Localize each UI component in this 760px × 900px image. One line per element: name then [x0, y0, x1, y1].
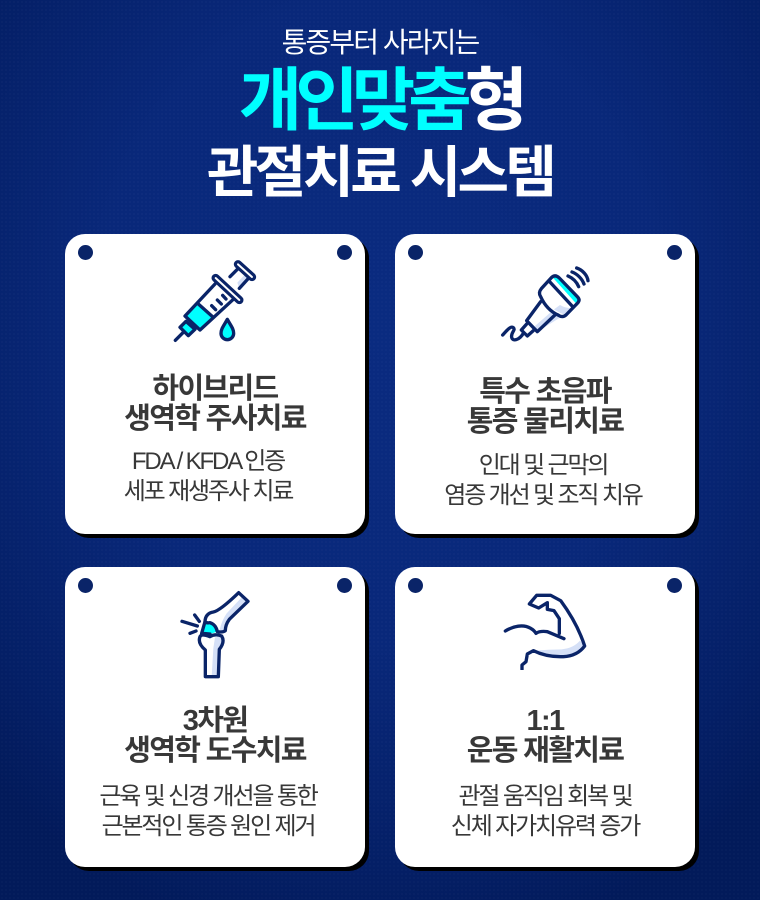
description: [444, 452, 643, 509]
panel: hybrid injection: [65, 234, 365, 534]
heading: [467, 705, 624, 767]
description: 인대 및 근막의: [479, 452, 607, 479]
description: 신체 자가치유력 증가: [451, 813, 639, 840]
description: 세포 재생주사 치료: [124, 478, 292, 505]
heading: 특수 초음파: [479, 376, 611, 408]
description: [124, 448, 294, 505]
icon: ultrasound probe: [500, 266, 590, 342]
subtitle: 통증부터 사라지는: [282, 27, 478, 58]
description: [451, 783, 641, 840]
description: FDA / KFDA 인증: [132, 448, 284, 475]
description: 관절 움직임 회복 및: [458, 783, 632, 810]
heading: [124, 705, 306, 767]
panel: manual therapy: [65, 567, 365, 867]
icon: flexed arm: [504, 594, 586, 670]
heading: 1:1: [527, 705, 563, 737]
icon: syringe: [174, 260, 256, 342]
description: 염증 개선 및 조직 치유: [444, 482, 642, 509]
panel: rehabilitation: [395, 567, 695, 867]
heading: 운동 재활치료: [467, 735, 623, 767]
heading: [467, 376, 624, 438]
heading: 하이브리드: [152, 373, 278, 405]
heading: 생역학 도수치료: [124, 735, 306, 767]
main title line 1: 개인맞춤형: [239, 62, 521, 139]
title: [207, 27, 553, 204]
heading: 생역학 주사치료: [124, 403, 306, 435]
heading: [124, 373, 306, 435]
main title line 2: 관절치료 시스템: [207, 141, 553, 204]
description: 근육 및 신경 개선을 통한: [99, 783, 317, 810]
icon: knee joint: [180, 590, 250, 678]
heading: 3차원: [183, 705, 247, 737]
description: [99, 783, 318, 840]
panel: ultrasound therapy: [395, 234, 695, 534]
description: 근본적인 통증 원인 제거: [102, 813, 314, 840]
heading: 통증 물리치료: [467, 406, 623, 438]
